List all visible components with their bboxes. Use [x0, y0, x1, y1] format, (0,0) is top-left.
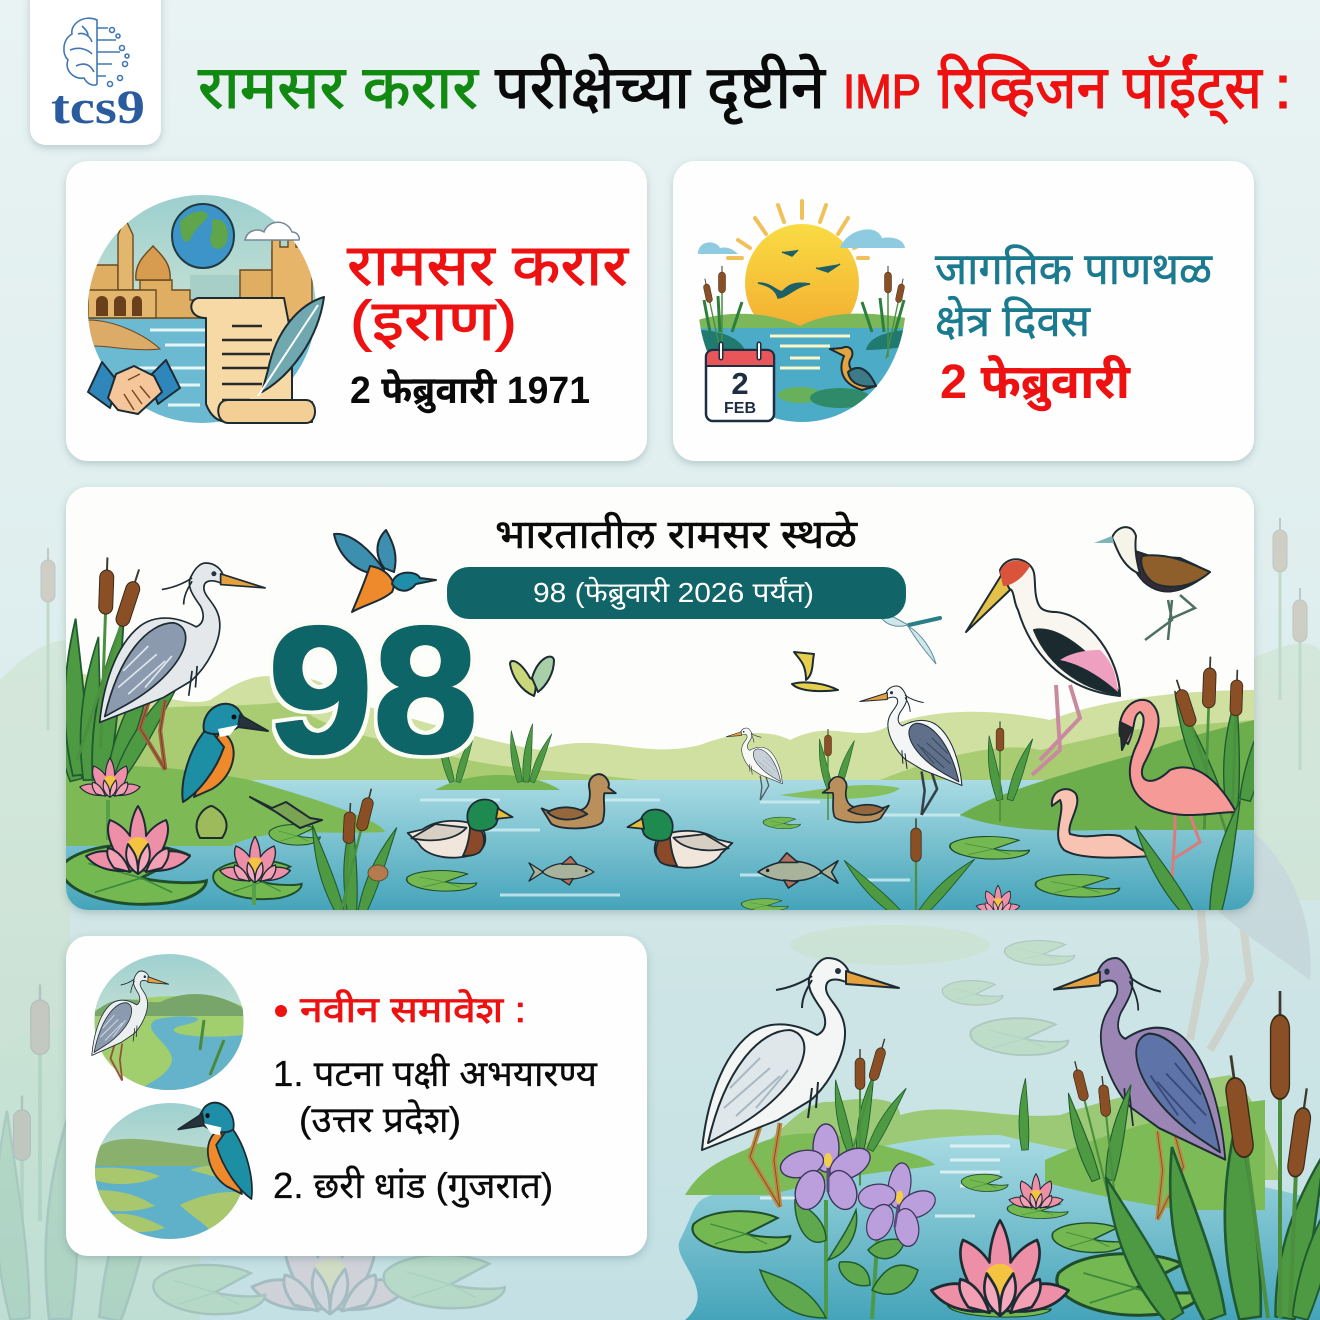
lotus cluster	[62, 758, 320, 905]
bullet	[275, 1005, 287, 1017]
dragonfly	[880, 615, 940, 664]
icon: duck on water	[830, 347, 876, 390]
reeds left	[66, 557, 176, 782]
icon: calendar 2 FEB: 2	[731, 366, 749, 401]
purple heron	[1054, 958, 1225, 1219]
icon: calendar 2 FEB	[706, 344, 774, 421]
hills	[82, 674, 1254, 780]
ducks	[408, 774, 889, 868]
illustration: sunrise wetland	[698, 201, 906, 428]
title: :	[1274, 54, 1292, 121]
heading: Day: क्षेत्र दिवस	[935, 295, 1091, 346]
text: Iran: (इराण)	[350, 289, 517, 352]
left bank	[66, 766, 385, 846]
cattails center	[826, 1037, 1131, 1212]
icon: cloud	[245, 222, 299, 240]
jacana	[1094, 527, 1210, 640]
faded background scenery	[0, 518, 1320, 1320]
reeds right	[813, 656, 1282, 837]
small lotus	[1009, 1174, 1063, 1209]
panel: Ramsar sites in India	[62, 486, 1258, 916]
branch and lizard	[250, 797, 322, 828]
heading: World Wetlands: जागतिक पाणथळ	[935, 244, 1214, 294]
illustration: kingfisher at Chhari Dhand	[95, 1102, 253, 1239]
heading: Ramsar sites in India: भारतातील रामसर स्थळे	[495, 512, 858, 557]
icon: globe	[172, 204, 234, 268]
lily pads	[407, 817, 1119, 914]
logo wordmark: tcs9	[51, 81, 145, 134]
title: रिव्हिजन पॉईंट्स	[938, 54, 1263, 124]
icon: quill	[258, 297, 324, 396]
foreground reeds	[844, 800, 1241, 910]
foreground reeds right	[1081, 991, 1320, 1320]
panel: World Wetlands Day	[673, 161, 1254, 461]
reed middle	[312, 788, 398, 910]
wetland scene	[66, 526, 1254, 910]
green banks	[685, 1133, 935, 1195]
item 1 state: Uttar Pradesh: (उत्तर प्रदेश)	[299, 1099, 461, 1140]
flying kingfisher	[334, 530, 436, 612]
large lotus	[931, 1220, 1069, 1317]
kingfisher perched	[182, 704, 268, 802]
water	[66, 780, 1254, 910]
big number 98: 98	[268, 590, 478, 791]
water hyacinths	[760, 1124, 945, 1319]
icon: handshake	[88, 360, 180, 414]
heading: Ramsar convention: रामसर करार	[347, 233, 629, 298]
right bank	[960, 720, 1254, 830]
item 2: Chhari Dhand, Gujarat: 2. छरी धांड (गुजरात)	[273, 1165, 553, 1208]
icon: scroll	[191, 298, 315, 423]
icon: brain circuit	[64, 18, 129, 86]
title: परीक्षेच्या दृष्टीने	[495, 54, 827, 125]
heading: new inclusion: नवीन समावेश :	[300, 989, 526, 1030]
white bird	[726, 728, 782, 800]
fish	[529, 853, 838, 888]
painted stork	[966, 559, 1120, 775]
logo card	[30, 0, 161, 145]
panel: new inclusions	[66, 936, 647, 1256]
heron mid	[860, 686, 962, 815]
item 1: Patna bird sanctuary: 1. पटना पक्षी अभयारण्य	[273, 1053, 598, 1094]
illustration: Ramsar Iran city, globe and scroll	[88, 194, 330, 430]
butterfly	[510, 657, 554, 696]
flying fish icon	[792, 652, 838, 691]
date: 2 February 1971: 2 फेब्रुवारी 1971	[350, 368, 590, 414]
title: रामसर करार	[198, 54, 480, 121]
pill: count until February 2026	[447, 567, 906, 619]
panel: Ramsar convention	[66, 161, 647, 461]
water	[679, 1135, 1320, 1320]
left heron	[100, 563, 265, 770]
title	[198, 54, 1292, 125]
lily pads	[692, 1174, 1201, 1315]
illustration: heron at Patna sanctuary	[91, 954, 244, 1090]
date: 2 February: 2 फेब्रुवारी	[940, 354, 1131, 411]
icon: calendar 2 FEB: FEB	[724, 400, 756, 417]
egret	[702, 958, 899, 1207]
flamingo swimming	[1052, 789, 1152, 858]
title: IMP	[843, 66, 921, 119]
flamingo standing	[1119, 700, 1236, 880]
pill: count until February 2026: 98 (फेब्रुवारी 2026 पर्यंत)	[533, 576, 814, 610]
bottom-right wetland illustration	[679, 958, 1320, 1320]
hills	[760, 1075, 1280, 1180]
